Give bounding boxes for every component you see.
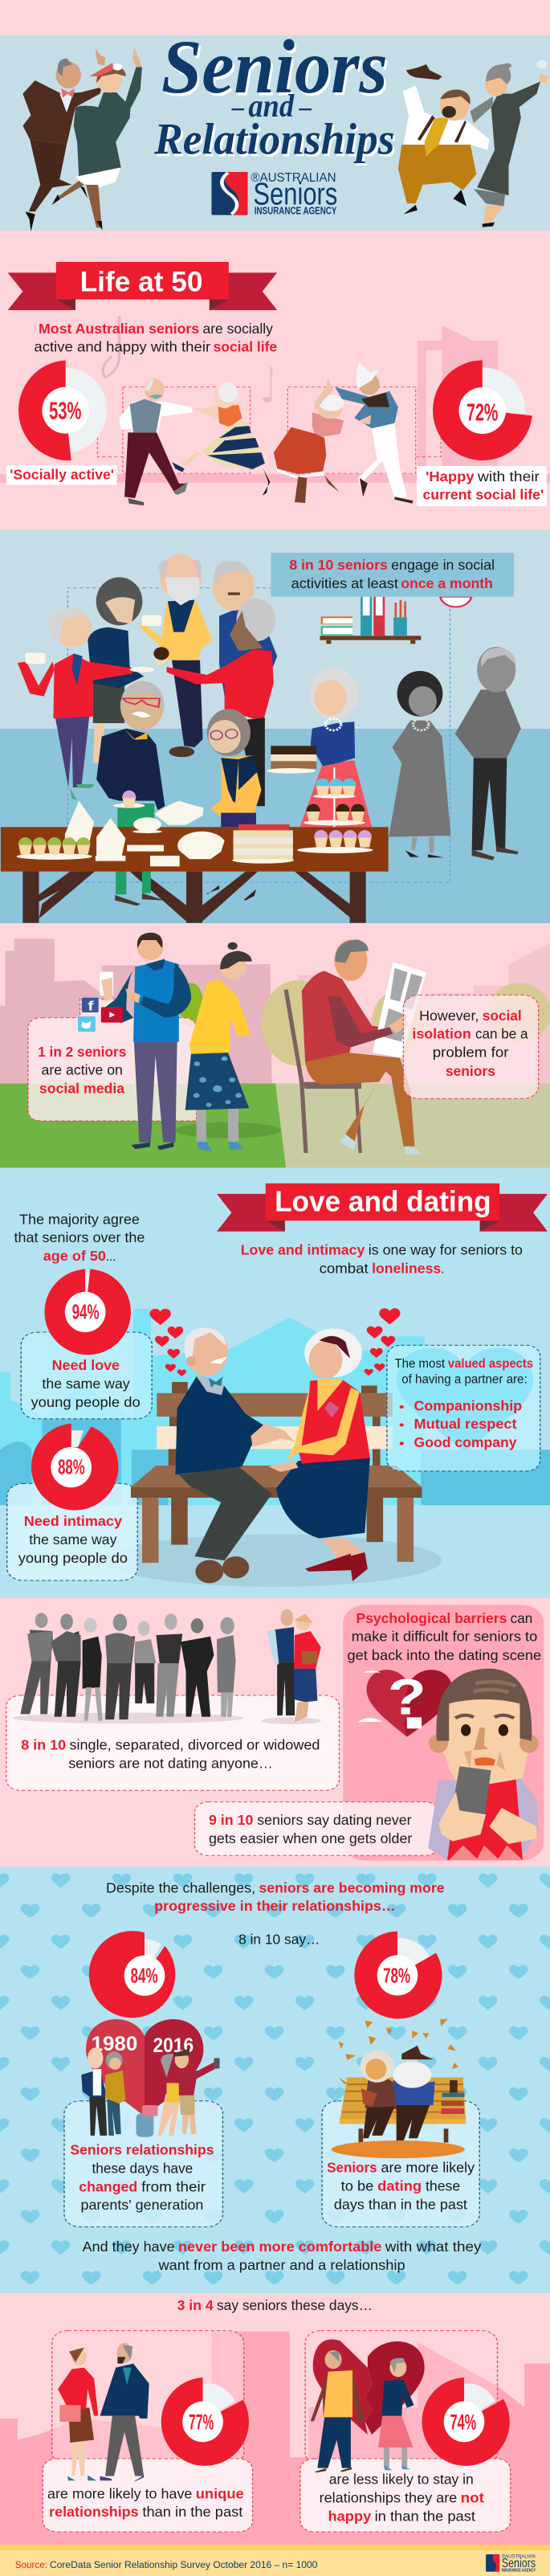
intro text: love and intimacy: Love and intimacy [241, 1243, 365, 1258]
callout: social isolation: problem for [433, 1045, 509, 1061]
donut chart: 53% socially active: 53% [49, 397, 81, 425]
callout: more likely to be dating: these [426, 2179, 460, 2194]
panel: social activities [1, 553, 521, 923]
lonely grey man [455, 647, 521, 861]
man reading newspaper on a chair [286, 939, 426, 1155]
callout: 8 in 10 seniors [271, 553, 514, 597]
panel: progressive relationships [0, 1867, 550, 2293]
background city [0, 1309, 550, 1587]
callout: relationships changed: Seniors relationships [70, 2142, 214, 2158]
title [153, 24, 397, 166]
intro text: majority agree [14, 1212, 145, 1264]
intro text: social life [214, 340, 277, 355]
logo: Australian Seniors Insurance Agency: ®AUSTRALIAN [251, 170, 336, 184]
intro text: love and intimacy: . [441, 1261, 445, 1277]
illustration: heart 1980 vs 2016 couples: 1980 [92, 2033, 137, 2055]
panel: social media and isolation [0, 933, 550, 1167]
callout: valued aspects of a partner: Companionship [414, 1399, 522, 1414]
left dancing couple [22, 47, 142, 231]
background building and notes [0, 316, 550, 483]
dancers: vest man and striped skirt woman [120, 378, 270, 505]
ribbon heading: Love and dating: Love and dating [275, 1185, 491, 1217]
callout: relationships changed: from their [141, 2180, 206, 2195]
text: despite the challenges [106, 1881, 445, 1948]
donut chart: 84%: 84% [131, 1965, 158, 1988]
callout: need intimacy: Need intimacy [24, 1514, 122, 1529]
frames around illustrations [52, 2331, 498, 2464]
callout: 9 in 10: gets easier when one gets older [209, 1831, 413, 1846]
worried man with phone [428, 1669, 539, 1860]
callout: not happy: are less likely to stay in [329, 2472, 474, 2488]
seated man with red glasses [96, 681, 165, 828]
callout: need intimacy [7, 1483, 137, 1580]
callout: 9 in 10: seniors say dating never [257, 1813, 412, 1828]
callout: 1 in 2 seniors: 1 in 2 seniors [38, 1045, 126, 1060]
callout: 8 in 10 seniors: once a month [401, 576, 493, 591]
callout: relationships changed: parents' generation [80, 2198, 203, 2214]
intro text: love and intimacy: combat [320, 1261, 369, 1277]
panel: header [22, 24, 549, 231]
heading: 3 in 4 [177, 2298, 373, 2313]
illustration: heart 1980 vs 2016 couples [81, 2019, 219, 2137]
callout: need love [21, 1332, 152, 1419]
heading: 3 in 4: 3 in 4 [177, 2298, 214, 2313]
callout: more likely to be dating [322, 2101, 479, 2226]
donut chart: 53% socially active [18, 360, 107, 460]
panel: psychological barriers background [343, 1605, 544, 1861]
title: and [248, 88, 295, 124]
intro text: are socially [203, 321, 274, 337]
source footer [15, 2559, 318, 2570]
donut chart: 77%: 77% [189, 2410, 214, 2434]
callout: need love: Need love [52, 1358, 120, 1374]
intro text: majority agree: The majority agree [19, 1212, 140, 1228]
ribbon heading: Love and dating [217, 1184, 548, 1232]
callout: need love: the same way [42, 1376, 130, 1392]
callout: 1 in 2 seniors [28, 999, 197, 1121]
donut chart: 74%: 74% [450, 2410, 476, 2434]
callout: 8 in 10 not dating: seniors are not dating anyone… [68, 1756, 273, 1772]
callout: more likely to be dating: to be [341, 2179, 373, 2194]
callout: more likely to be dating: days than in the past [334, 2198, 467, 2213]
callout: 8 in 10 not dating: 8 in 10 [21, 1738, 66, 1753]
illustration: heart 1980 vs 2016 couples: 2016 [153, 2034, 194, 2057]
callout: 1 in 2 seniors: social media [39, 1082, 125, 1097]
ribbon heading: Life at 50 [8, 262, 277, 310]
callout: 8 in 10 not dating [6, 1695, 339, 1790]
title: Seniors [161, 24, 388, 109]
text: psychological barriers [348, 1611, 541, 1663]
logo: footer: ®AUSTRALIAN [502, 2554, 536, 2559]
text: psychological barriers: Psychological barriers [356, 1611, 507, 1626]
heading: 3 in 4: say seniors these days… [217, 2298, 373, 2313]
donut chart: 72% happy [433, 360, 532, 460]
couple holding hands [58, 2343, 149, 2481]
callout: not happy: relationships they are [320, 2491, 457, 2506]
donut chart: 88% need intimacy: 88% [58, 1456, 85, 1479]
panel: 3 in 4 say [0, 2298, 550, 2573]
intro text: majority agree: that seniors over the [14, 1230, 145, 1245]
callout: relationships changed [64, 2101, 222, 2226]
skyline and ground [0, 938, 550, 1167]
panel: Love and dating [0, 1184, 550, 1587]
callout: unique relationships: unique [196, 2487, 244, 2502]
intro text: majority agree: age of 50 [43, 1249, 106, 1264]
callout: social isolation: However, [419, 1008, 479, 1024]
text: despite the challenges: seniors are becoming more [259, 1881, 445, 1896]
donut chart: 94% need love: 94% [72, 1301, 100, 1324]
callout: more likely to be dating: Seniors [327, 2161, 377, 2176]
group of grey single seniors [12, 1613, 321, 1724]
callout: social isolation: isolation [412, 1027, 471, 1042]
icon: broken heart with question mark: ? [388, 1668, 426, 1725]
callout: relationships changed: changed [79, 2180, 137, 2195]
intro text: love and intimacy: loneliness [372, 1261, 441, 1277]
callout: valued aspects of a partner: Good company [414, 1435, 517, 1450]
callout: not happy: in than the past [375, 2509, 475, 2525]
donut chart: 88% need intimacy [31, 1424, 118, 1511]
man with phone [100, 933, 191, 1150]
elderly woman on bench [268, 1329, 370, 1581]
icons: Facebook, YouTube, Twitter [78, 998, 123, 1032]
logo: Australian Seniors Insurance Agency: INSURANCE AGENCY [255, 206, 337, 217]
label: happy with social life: with their [477, 469, 540, 485]
callout: more likely to be dating: are more likely [381, 2161, 475, 2176]
source footer: Source: [15, 2559, 47, 2570]
callout: social isolation [403, 995, 539, 1098]
panel: dating barriers [6, 1605, 544, 1861]
callout: not happy: not [461, 2491, 484, 2506]
callout: relationships changed: these days have [92, 2161, 193, 2177]
donut chart: 72% happy: 72% [466, 399, 498, 426]
callout: unique relationships: than in the past [142, 2504, 243, 2520]
title: Seniors [164, 27, 389, 112]
text: never been more comfortable: with what they [385, 2239, 482, 2255]
woman in yellow [185, 942, 252, 1151]
logo: Australian Seniors Insurance Agency: Seniors [253, 175, 337, 211]
callout: unique relationships [43, 2459, 253, 2532]
label: socially active [6, 465, 116, 485]
callout: social isolation: seniors [446, 1064, 495, 1079]
callout: valued aspects of a partner: The most [395, 1356, 445, 1371]
callout: social isolation: social [483, 1008, 522, 1024]
donut chart: 77% [161, 2378, 249, 2466]
logo: Australian Seniors Insurance Agency [211, 170, 337, 217]
icon: broken heart with question mark [358, 1668, 453, 1737]
couple together [267, 1609, 321, 1722]
icon: floating hearts [150, 1308, 401, 1376]
elderly man on bench [175, 1327, 295, 1583]
group of seniors socialising [18, 554, 277, 806]
callout: need love: young people do [31, 1395, 141, 1410]
intro text: Most Australian seniors [39, 321, 199, 337]
title: Relationships [153, 115, 395, 164]
panel: Life at 50 [0, 262, 550, 506]
text: never been more comfortable: And they have [83, 2239, 175, 2255]
background heart pattern [0, 1867, 550, 2293]
callout: need intimacy: the same way [29, 1532, 117, 1548]
callout: unique relationships: relationships [49, 2504, 139, 2520]
label: happy with social life [417, 466, 547, 506]
donut chart: 78%: 78% [383, 1965, 410, 1988]
logo: footer [486, 2554, 536, 2573]
callout: social isolation: can be a [475, 1027, 528, 1042]
callout: 1 in 2 seniors: are active on [42, 1063, 123, 1078]
callout: 8 in 10 seniors: 8 in 10 seniors [289, 558, 388, 573]
icons: Facebook, YouTube, Twitter: f [88, 999, 94, 1014]
text: despite the challenges: progressive in their relationships… [154, 1899, 396, 1915]
text: never been more comfortable [83, 2239, 482, 2273]
text: never been more comfortable: want from a partner and a relationship [158, 2258, 405, 2273]
source footer: CoreData Senior Relationship Survey October 2016 – n= 1000 [50, 2559, 318, 2570]
woman pouring tea [207, 709, 261, 827]
text: despite the challenges: Despite the challenges, [106, 1881, 255, 1896]
callout: 9 in 10: 9 in 10 [209, 1813, 253, 1828]
intro text: active and happy with their [34, 340, 210, 355]
text: never been more comfortable: never been more comfortable [178, 2239, 381, 2255]
donut chart: 84% [89, 1931, 175, 2018]
ribbon heading: Life at 50: Life at 50 [80, 266, 203, 297]
text: despite the challenges: 8 in 10 say… [238, 1932, 320, 1948]
callout: 8 in 10 seniors: engage in social [391, 558, 495, 573]
donut chart: 94% need love [44, 1270, 131, 1355]
lonely grey woman [389, 671, 450, 857]
woman with cake and tiered stand [267, 668, 372, 832]
illustration: autumn bench couple [332, 2019, 466, 2158]
title: Relationships [156, 117, 397, 166]
callout: valued aspects of a partner: Mutual respect [414, 1417, 517, 1433]
right dancing couple [398, 60, 549, 227]
donut chart: 74% [422, 2378, 510, 2466]
table with tea set [1, 801, 389, 923]
callout: more likely to be dating: dating [377, 2179, 422, 2194]
callout: valued aspects of a partner [387, 1345, 540, 1471]
dancers: polka dot woman and cowboy [274, 363, 414, 504]
intro text: love and intimacy [241, 1243, 523, 1277]
callout: not happy [300, 2459, 511, 2532]
intro text [34, 321, 277, 355]
callout: unique relationships: are more likely to have [47, 2487, 192, 2502]
text: psychological barriers: can [511, 1611, 532, 1626]
bench [131, 1382, 422, 1563]
background skyline [0, 2332, 550, 2545]
label: socially active: 'Socially active' [10, 468, 114, 483]
callout: 8 in 10 not dating: single, separated, divorced or widowed [70, 1738, 320, 1753]
donut chart: 78% [354, 1932, 442, 2018]
dashed frame and shelf [67, 588, 471, 882]
callout: not happy: happy [328, 2509, 372, 2525]
separating couple with broken heart [311, 2339, 425, 2472]
intro text: majority agree: ... [106, 1249, 116, 1264]
callout: 8 in 10 seniors: activities at least [291, 576, 398, 591]
callout: 9 in 10 [194, 1802, 438, 1855]
label: happy with social life: 'Happy [426, 469, 475, 485]
callout: need intimacy: young people do [18, 1551, 128, 1566]
